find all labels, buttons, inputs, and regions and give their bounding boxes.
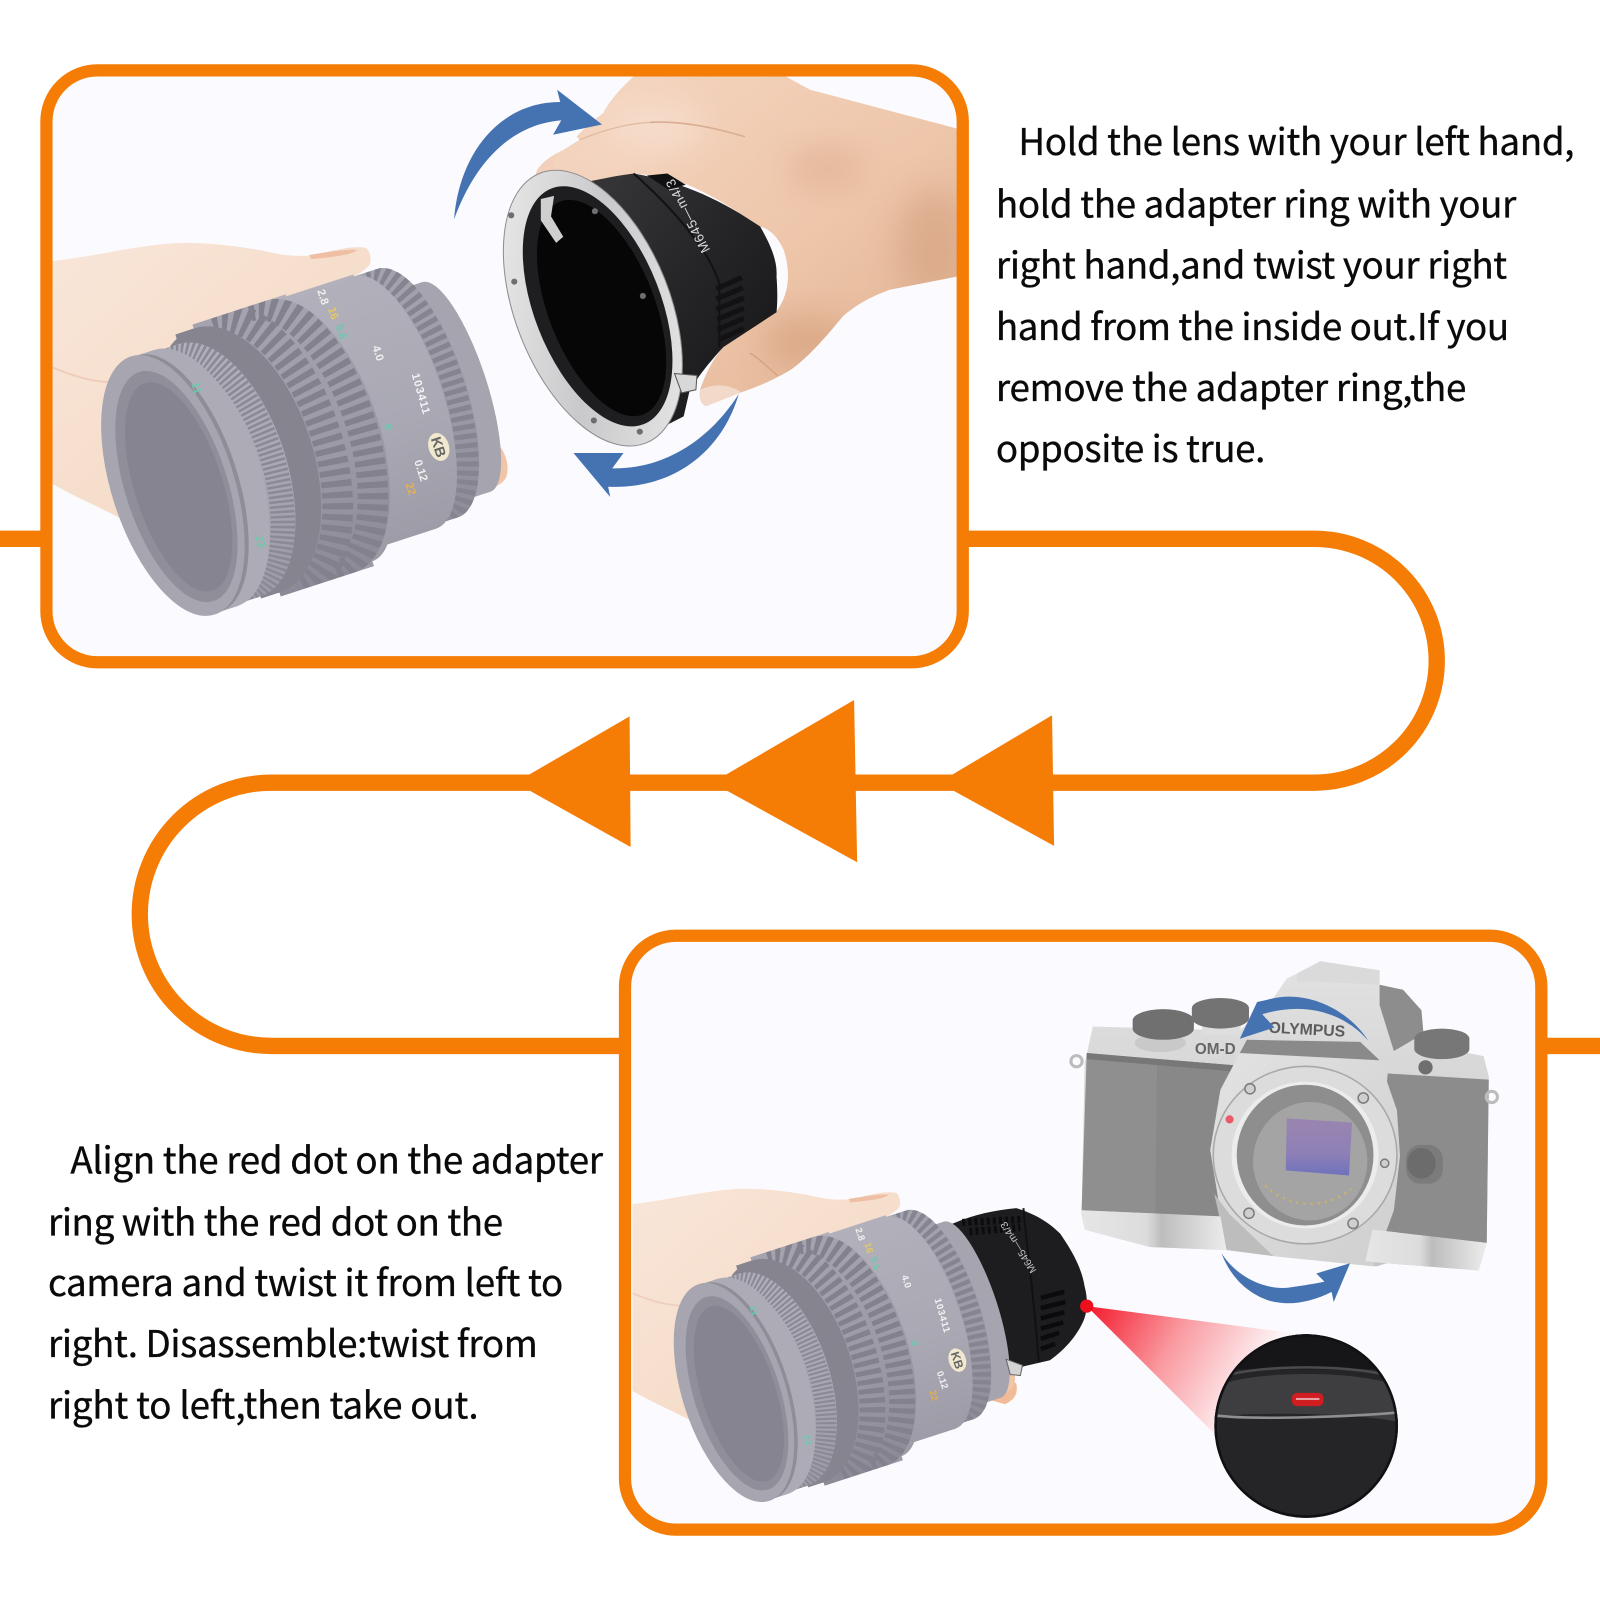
camera dials [1071, 998, 1497, 1103]
panel: attaching the lens to the camera [625, 936, 1541, 1530]
mount lever and screws [541, 196, 563, 243]
magnified inset: red dot on adapter [1214, 1333, 1400, 1520]
camera body: OM-D [1195, 1041, 1236, 1058]
orange connector path [0, 539, 1600, 1046]
text block: removal instructions: opposite is true. [996, 419, 1265, 473]
text block: removal instructions: hold the adapter ring with your [996, 174, 1517, 228]
red dot [1080, 1299, 1093, 1313]
arrow triangles [515, 700, 1054, 862]
camera bottom strips [1082, 1210, 1227, 1250]
blue rotation arrow: camera top [1240, 997, 1368, 1041]
text block: mounting instructions: right. Disassemble:twist from [48, 1314, 538, 1368]
text block: mounting instructions: Align the red dot on the adapter [70, 1130, 604, 1184]
adapter latch [1006, 1359, 1022, 1376]
text block: mounting instructions: camera and twist it from left to [48, 1253, 563, 1307]
blue rotation arrow: bottom [573, 394, 739, 497]
adapter ring: M645—m4/3 [663, 176, 713, 255]
fitted adapter ring [952, 1208, 1087, 1404]
text block: removal instructions: Hold the lens with your left hand, [1018, 112, 1574, 166]
text block: removal instructions: remove the adapter ring,the [996, 358, 1466, 412]
adapter ring [502, 170, 778, 446]
blue rotation arrow: camera bottom [1221, 1253, 1350, 1303]
lens with adapter fitted [632, 1189, 1034, 1519]
text block: mounting instructions: ring with the red dot on the [48, 1193, 503, 1247]
right hand holding adapter [536, 76, 957, 406]
text block: removal instructions [996, 112, 1574, 473]
text block: mounting instructions [48, 1130, 604, 1429]
lens held in left hand [52, 243, 530, 636]
magnifier cone [1091, 1307, 1284, 1434]
text block: removal instructions: right hand,and twist your right [996, 236, 1507, 290]
fitted adapter ring: M645—m4/3 [999, 1219, 1039, 1275]
text block: removal instructions: hand from the inside out.If you [996, 297, 1509, 351]
text block: mounting instructions: right to left,then take out. [48, 1375, 479, 1429]
camera body: OLYMPUS [1268, 1020, 1346, 1041]
panel: removing the adapter [46, 70, 970, 662]
blue rotation arrow: top [454, 90, 602, 219]
camera body [1071, 961, 1497, 1270]
